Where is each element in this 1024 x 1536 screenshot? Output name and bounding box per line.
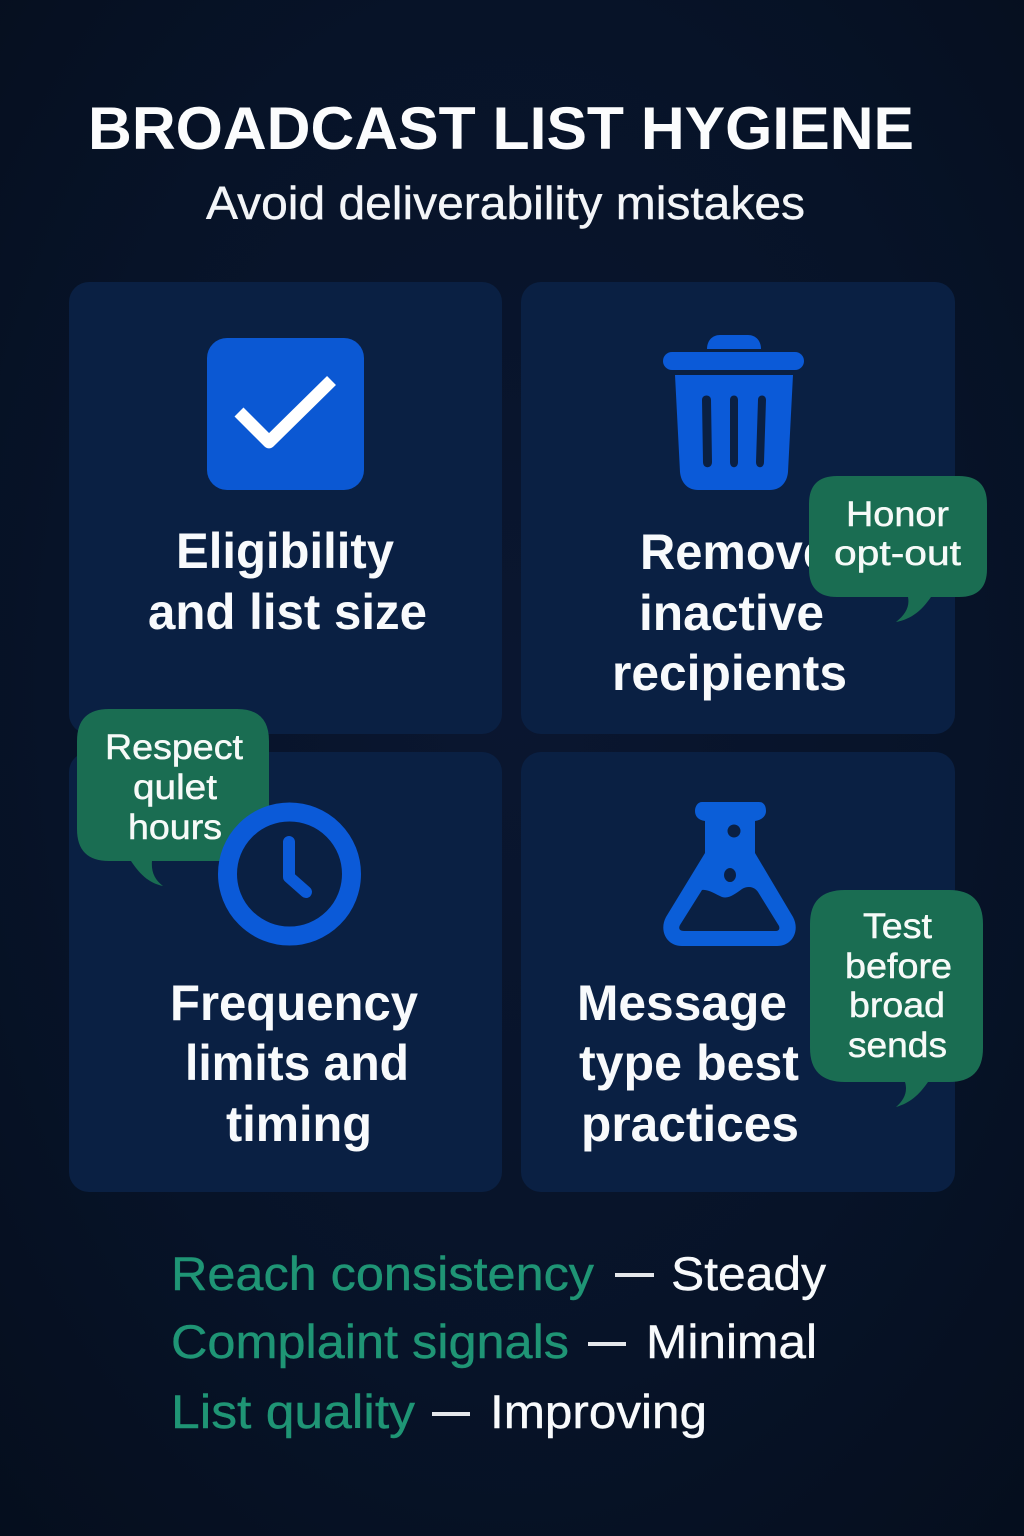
- heading: frequency limits and timing: Frequency: [170, 975, 418, 1031]
- callout: respect quiet hours: Respect: [105, 728, 243, 767]
- heading: message type best practices: Message: [577, 975, 787, 1031]
- panel: remove inactive recipients: [521, 282, 987, 734]
- metric: reach consistency: Reach consistency: [171, 1247, 595, 1300]
- callout: test before broad sends: sends: [848, 1026, 947, 1065]
- title: BROADCAST LIST HYGIENE: [88, 95, 914, 162]
- callout: respect quiet hours: qulet: [133, 768, 217, 807]
- subtitle: Avoid deliverability mistakes: [206, 177, 805, 229]
- metric: complaint signals: Minimal: [646, 1315, 817, 1368]
- heading: message type best practices: practices: [581, 1096, 799, 1152]
- metric: list quality: Improving: [490, 1385, 707, 1438]
- heading: remove inactive recipients: inactive: [639, 585, 824, 641]
- metric: reach consistency: [171, 1247, 827, 1300]
- heading: eligibility: Eligibility: [176, 523, 394, 579]
- metric: list quality: [171, 1385, 707, 1438]
- callout: test before broad sends: broad: [849, 986, 945, 1025]
- metric: complaint signals: [171, 1315, 817, 1368]
- heading: eligibility: and list size: [148, 584, 427, 640]
- heading: frequency limits and timing: [170, 975, 418, 1152]
- callout: test before broad sends: Test: [863, 907, 932, 946]
- heading: remove inactive recipients: recipients: [612, 645, 847, 701]
- callout: honor opt-out: [809, 476, 987, 622]
- metric: reach consistency: Steady: [671, 1247, 827, 1300]
- callout: honor opt-out: Honor: [846, 495, 949, 534]
- metric: list quality: List quality: [171, 1385, 416, 1438]
- metric: complaint signals: Complaint signals: [171, 1315, 569, 1368]
- callout: honor opt-out: opt-out: [834, 534, 961, 573]
- heading: frequency limits and timing: limits and: [185, 1035, 409, 1091]
- panel: eligibility and list size: [69, 282, 502, 734]
- callout: respect quiet hours: hours: [128, 808, 222, 847]
- icon: clock: [228, 812, 352, 936]
- callout: respect quiet hours: [77, 709, 269, 886]
- heading: frequency limits and timing: timing: [226, 1096, 372, 1152]
- icon: flask: [663, 802, 796, 946]
- heading: remove inactive recipients: Remove: [640, 524, 830, 580]
- heading: message type best practices: type best: [579, 1035, 799, 1091]
- icon: checkbox: [207, 338, 364, 490]
- heading: message type best practices: [577, 975, 799, 1152]
- callout: test before broad sends: [810, 890, 983, 1107]
- heading: eligibility: [148, 523, 427, 640]
- callout: test before broad sends: before: [845, 947, 952, 986]
- icon: trash can: [663, 335, 804, 490]
- panel: frequency limits and timing: [69, 709, 502, 1192]
- heading: remove inactive recipients: [612, 524, 847, 701]
- panel: message type best practices: [521, 752, 983, 1192]
